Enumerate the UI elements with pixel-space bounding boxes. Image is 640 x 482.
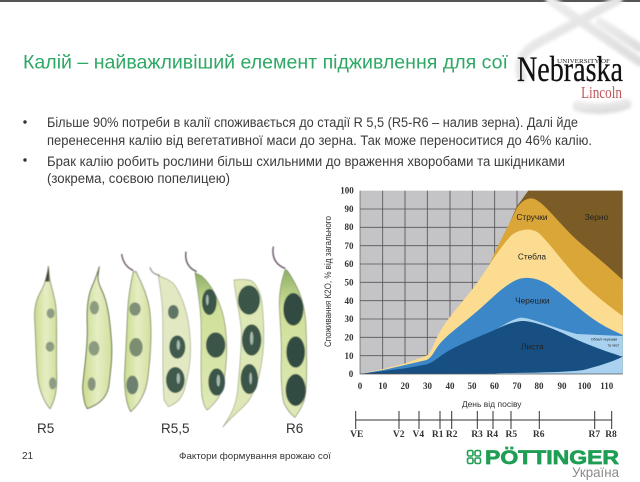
soybean pods illustration <box>35 247 307 427</box>
growth stage timeline: R1 <box>432 430 444 440</box>
chart label: fallen leaves: та лист <box>607 343 620 347</box>
pod R5 <box>35 266 57 409</box>
growth stage timeline: R7 <box>588 430 600 440</box>
pod 6 <box>223 280 264 427</box>
area: leaves <box>360 321 623 374</box>
top edge bar <box>0 0 640 2</box>
y axis tick labels: 100 <box>340 186 354 196</box>
y axis tick labels: 90 <box>344 204 354 214</box>
x axis tick labels: 110 <box>600 381 614 391</box>
icon: four rounded squares <box>468 450 480 464</box>
area: petioles <box>360 278 623 374</box>
background ornament <box>520 0 640 109</box>
pod 5 <box>186 252 227 410</box>
growth stage timeline: R6 <box>533 430 545 440</box>
x axis tick labels: 10 <box>378 381 388 391</box>
growth stage timeline: R3 <box>471 430 483 440</box>
x axis tick labels: 90 <box>558 381 567 391</box>
x axis tick labels: 30 <box>423 381 432 391</box>
page number: 21 <box>22 451 34 462</box>
footer caption: Фактори формування врожаю сої <box>179 451 331 462</box>
y axis tick labels: 0 <box>349 369 354 379</box>
x axis tick labels: 50 <box>468 381 477 391</box>
x axis tick labels: 60 <box>490 381 500 391</box>
stage label R6: R6 <box>286 421 303 436</box>
growth stage timeline: V2 <box>393 430 405 440</box>
x axis tick labels: 0 <box>358 381 363 391</box>
growth stage timeline: VE <box>350 430 363 440</box>
x axis tick labels: 80 <box>534 381 544 391</box>
area: grain <box>490 191 623 374</box>
logo: Pottinger <box>468 448 619 480</box>
x axis tick labels: 20 <box>400 381 410 391</box>
plot frame <box>360 191 623 374</box>
growth stage timeline: V4 <box>412 430 424 440</box>
x axis tick labels: 70 <box>512 381 522 391</box>
pod R5,5 <box>150 267 190 407</box>
growth stage timeline: R5 <box>505 430 517 440</box>
bullet 2 <box>23 154 565 186</box>
y axis tick labels: 30 <box>344 314 354 324</box>
bullet 1: Більше 90% потреби в калії споживається до стадії R 5,5 (R5-R6 – налив зерна). Далі йде <box>47 115 578 130</box>
x axis tick labels: 100 <box>578 381 592 391</box>
plot background <box>360 191 623 374</box>
growth stage timeline <box>350 411 617 440</box>
y axis tick labels: 60 <box>344 259 354 269</box>
x axis tick labels: 40 <box>446 381 455 391</box>
title: Калій – найважливіший елемент підживлення для сої <box>23 52 509 74</box>
bullet 2: (зокрема, соєвою попелицею) <box>47 171 230 186</box>
y axis tick labels <box>340 186 354 379</box>
bullet 2: Брак калію робить рослини більш схильними до враження хворобами та шкідниками <box>47 154 565 169</box>
growth stage timeline: R8 <box>605 430 617 440</box>
y axis tick labels: 10 <box>344 351 354 361</box>
logo: Pottinger: PÖTTINGER <box>485 448 619 469</box>
chart label: leaves: Листя <box>521 341 544 351</box>
pod 2 <box>83 267 112 409</box>
pod R6 <box>273 247 307 417</box>
x axis title: День від посіву <box>462 399 522 409</box>
stage label R5,5: R5,5 <box>161 421 190 436</box>
area: pods <box>490 198 623 374</box>
logo: Pottinger: Україна <box>572 464 619 480</box>
stage label R5: R5 <box>37 421 54 436</box>
area: stems <box>360 230 623 374</box>
logo: University of Nebraska Lincoln <box>517 49 623 102</box>
chart label: petioles: Черешки <box>515 296 550 306</box>
growth stage timeline: R4 <box>486 430 498 440</box>
bullet 1 <box>23 115 592 148</box>
y axis tick labels: 70 <box>344 241 354 251</box>
growth stage timeline: R2 <box>446 430 458 440</box>
logo: University of Nebraska Lincoln: Lincoln <box>581 83 622 102</box>
chart label: stems: Стебла <box>518 251 546 261</box>
y axis tick labels: 40 <box>344 296 354 306</box>
y axis title: Споживання К2О, % від загального <box>323 216 333 347</box>
bullet list <box>23 115 592 186</box>
x axis tick labels <box>358 381 614 391</box>
pod 3 <box>122 254 151 412</box>
chart label: fallen leaves: Обпалі черешки <box>591 338 617 342</box>
area: fallen leaves and petioles <box>497 318 623 374</box>
chart label: grain: Зерно <box>585 212 608 222</box>
y axis tick labels: 50 <box>344 278 354 288</box>
chart label: fallen leaves <box>591 338 620 347</box>
chart label: pods: Стручки <box>516 212 548 222</box>
y axis tick labels: 80 <box>344 222 354 232</box>
bullet 1: перенесення калію від вегетативної маси до зерна. Так може переноситися до 46% калію. <box>47 133 592 148</box>
logo: University of Nebraska Lincoln: UNIVERSITY OF <box>557 58 610 65</box>
stacked area chart <box>360 191 623 374</box>
y axis tick labels: 20 <box>344 332 354 342</box>
